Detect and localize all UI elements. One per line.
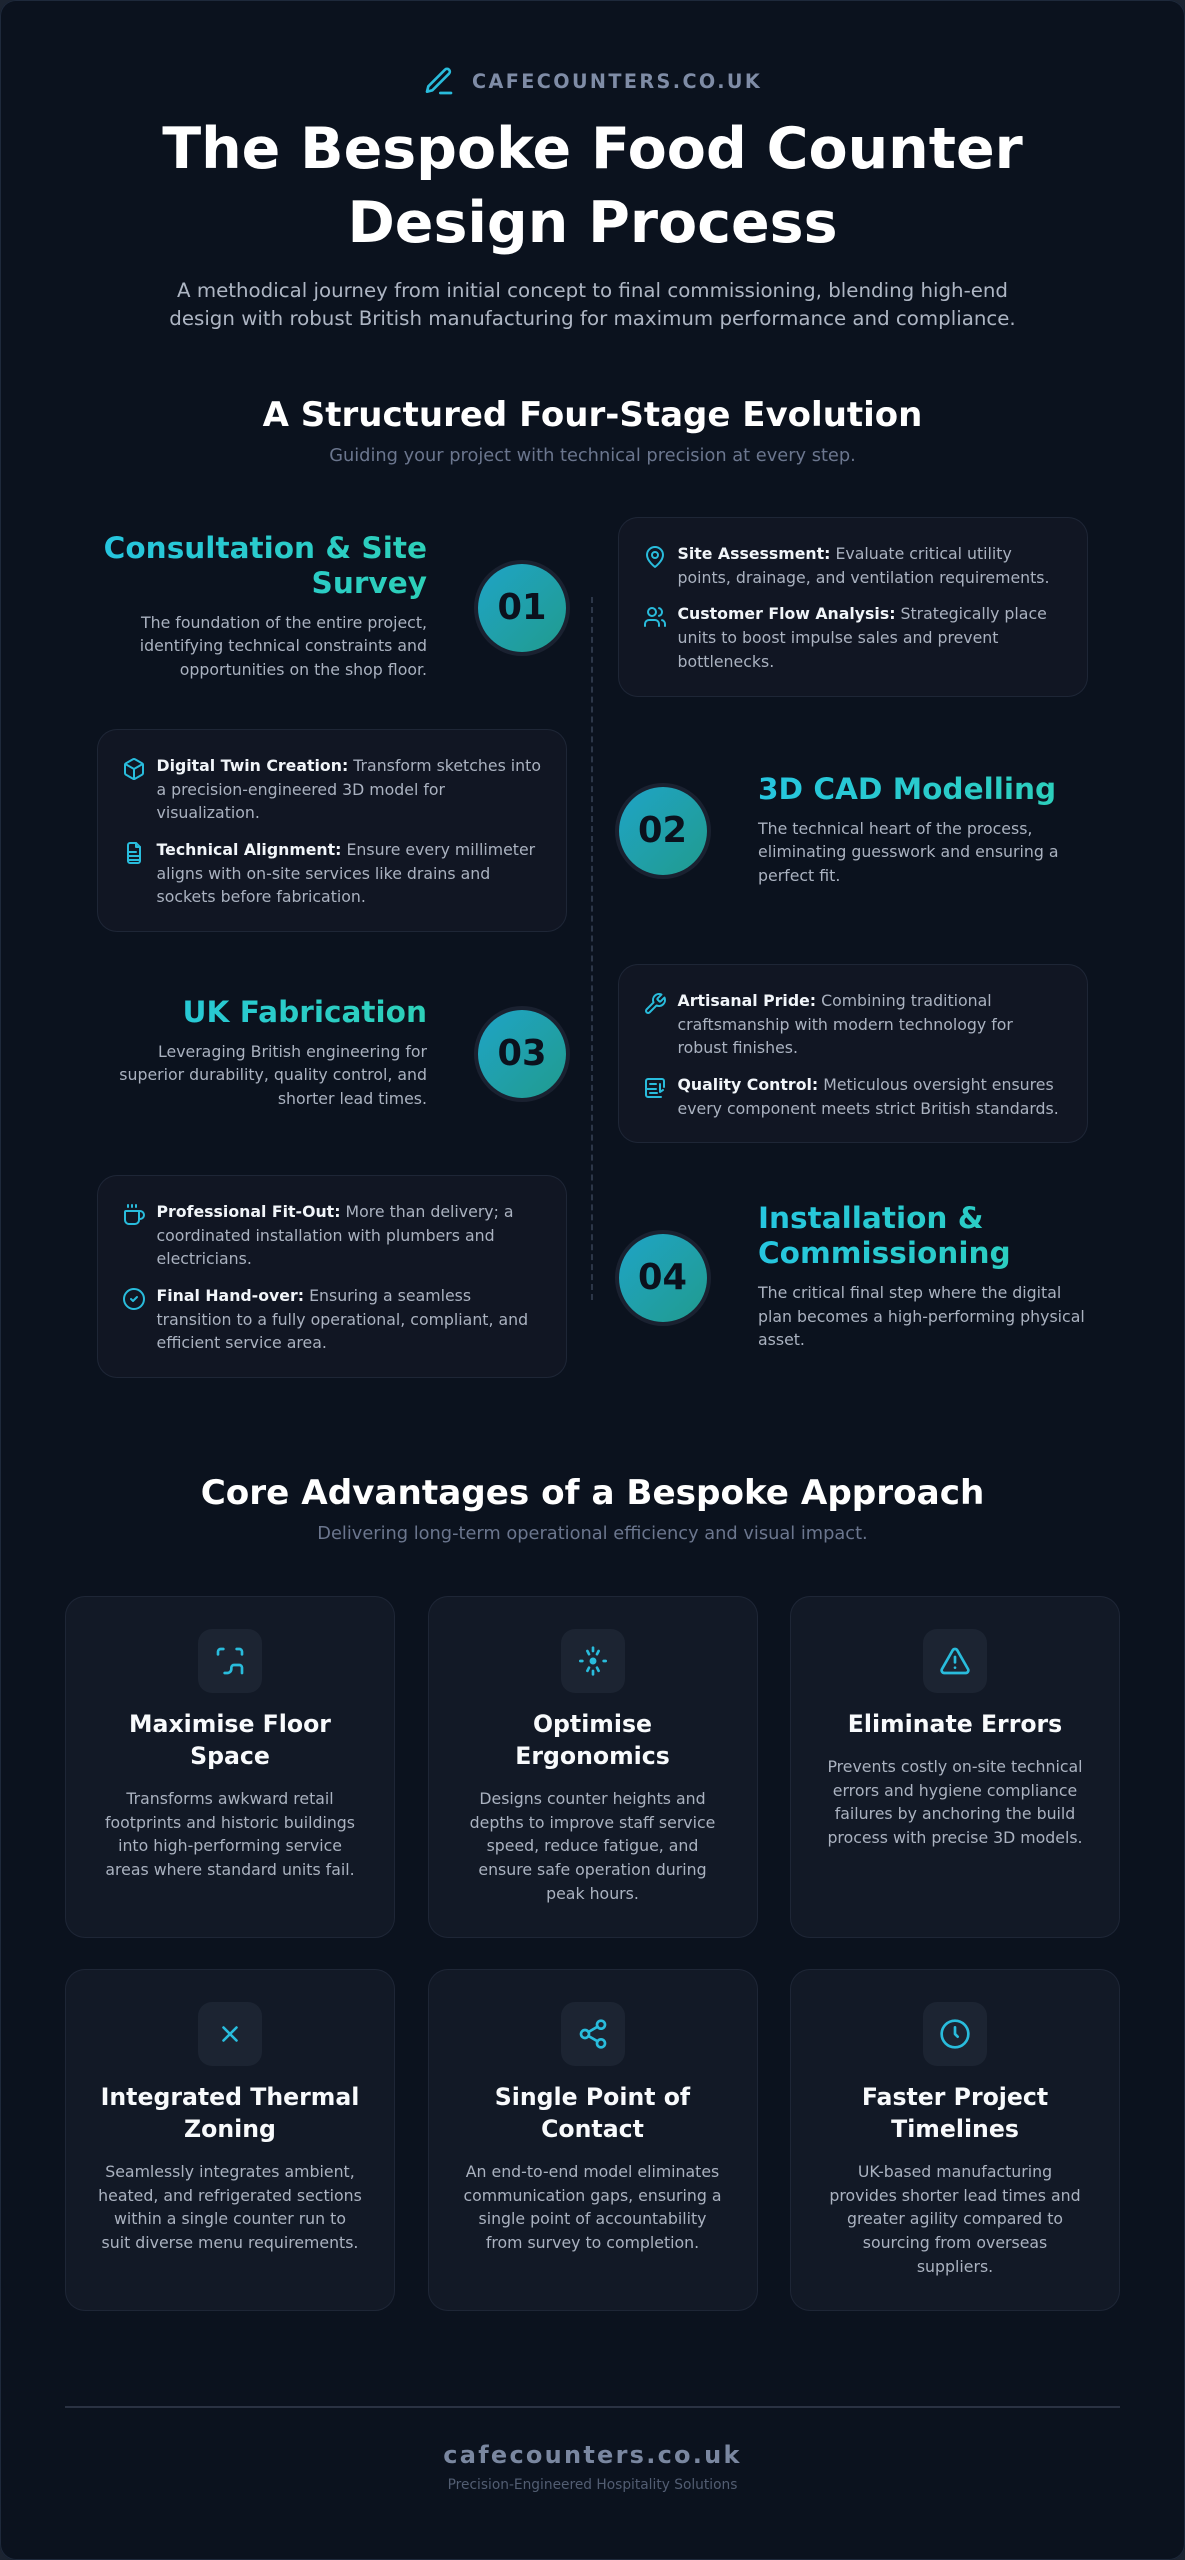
stage 1 title: Consultation & Site — [104, 531, 427, 565]
stage 4 description: plan becomes a high-performing physical — [758, 1307, 1085, 1326]
card title: Optimise — [533, 1710, 652, 1738]
digital twin item — [124, 756, 541, 822]
card: integrated thermal zoning — [65, 1969, 395, 2311]
stage 4 title: Installation & — [758, 1201, 984, 1235]
digital twin item: a precision-engineered 3D model for — [156, 780, 445, 799]
final hand-over item: efficient service area. — [156, 1333, 327, 1352]
customer flow item — [644, 604, 1047, 671]
card title — [129, 1710, 331, 1770]
professional fit-out item — [124, 1202, 514, 1268]
card text: process with precise 3D models. — [827, 1828, 1083, 1847]
card text: greater agility compared to — [847, 2209, 1063, 2228]
subtitle: A methodical journey from initial concept to final commissioning, blending high-end — [177, 278, 1008, 302]
stage 1 title — [97, 531, 427, 601]
stage 3 number — [478, 1010, 566, 1098]
stage 2 detail panel — [97, 729, 567, 932]
card title — [862, 2082, 1048, 2142]
icon: radial ticks — [560, 1629, 624, 1693]
heading: Core Advantages of a Bespoke Approach — [201, 1473, 984, 1513]
technical alignment item: aligns with on-site services like drains and — [156, 864, 490, 883]
technical alignment item — [127, 840, 536, 906]
icon: pen — [426, 68, 452, 94]
final hand-over item: transition to a fully operational, compliant, and — [156, 1310, 528, 1329]
digital twin item: Digital Twin Creation: Transform sketches into — [156, 756, 541, 775]
header — [162, 68, 1023, 330]
stage 1 title: Survey — [312, 566, 427, 600]
card: single point of contact — [428, 1969, 758, 2311]
card text: within a single counter run to — [114, 2209, 346, 2228]
card text — [470, 1789, 715, 1903]
stage 1 number — [478, 564, 566, 652]
subtitle: design with robust British manufacturing for maximum performance and compliance. — [169, 306, 1016, 330]
card text — [463, 2162, 722, 2252]
card title: Zoning — [184, 2114, 276, 2142]
stage 1 description: The foundation of the entire project, — [141, 612, 427, 632]
card text: Prevents costly on-site technical — [827, 1757, 1083, 1776]
brand name: CAFECOUNTERS.CO.UK — [472, 70, 762, 92]
card text: Designs counter heights and — [479, 1789, 706, 1808]
card text: footprints and historic buildings — [105, 1813, 355, 1832]
stage 1 number: 01 — [498, 586, 546, 628]
stage 2 description: perfect fit. — [758, 866, 840, 885]
stage 2 title: 3D CAD Modelling — [758, 772, 1056, 806]
customer flow item: units to boost impulse sales and prevent — [678, 628, 998, 647]
card text — [105, 1789, 355, 1879]
stage 4 description: asset. — [758, 1330, 805, 1349]
stage 3 description: superior durability, quality control, and — [119, 1065, 427, 1084]
technical alignment item: sockets before fabrication. — [156, 887, 366, 906]
stage 2 description: eliminating guesswork and ensuring a — [758, 842, 1059, 861]
final hand-over item: Final Hand-over: Ensuring a seamless — [156, 1286, 471, 1305]
title: Design Process — [347, 190, 838, 256]
card text: Transforms awkward retail — [126, 1789, 334, 1808]
card text: peak hours. — [546, 1884, 639, 1903]
stage 1 description — [140, 612, 427, 679]
card: eliminate errors — [790, 1596, 1120, 1938]
stage 1 description: identifying technical constraints and — [140, 636, 427, 655]
footer brand: cafecounters.co.uk — [443, 2441, 742, 2469]
stage 3 description: Leveraging British engineering for — [158, 1042, 427, 1060]
stage 4 description — [758, 1283, 1085, 1349]
card title: Contact — [541, 2114, 644, 2142]
card title: Eliminate Errors — [848, 1710, 1062, 1738]
card text: errors and hygiene compliance — [833, 1781, 1077, 1800]
footer tagline: Precision-Engineered Hospitality Solutions — [448, 2477, 737, 2493]
stage 4 detail panel — [97, 1175, 567, 1378]
stage 3: UK fabrication — [119, 964, 1088, 1143]
technical alignment item: Technical Alignment: Ensure every millimeter — [156, 840, 535, 859]
quality control item: Quality Control: Meticulous oversight ensures — [678, 1075, 1054, 1094]
title — [162, 116, 1023, 256]
artisanal pride item — [645, 991, 1013, 1057]
card title — [101, 2082, 359, 2142]
stage 2 description: The technical heart of the process, — [758, 818, 1032, 838]
title: The Bespoke Food Counter — [162, 116, 1023, 182]
artisanal pride item: Artisanal Pride: Combining traditional — [678, 991, 992, 1010]
stage 2 number — [618, 786, 706, 874]
stage 4 title: Commissioning — [758, 1236, 1011, 1270]
card text: suit diverse menu requirements. — [102, 2233, 358, 2252]
card title: Timelines — [891, 2114, 1019, 2142]
card text — [829, 2162, 1081, 2276]
card title: Integrated Thermal — [101, 2082, 359, 2110]
card text: failures by anchoring the build — [835, 1804, 1075, 1823]
card text: ensure safe operation during — [478, 1860, 707, 1879]
site assessment item: Site Assessment: Evaluate critical utility — [678, 544, 1012, 563]
site assessment item: points, drainage, and ventilation requirements. — [678, 568, 1050, 587]
stage 4 title — [758, 1201, 1088, 1271]
stage 4 number: 04 — [638, 1256, 687, 1298]
card title: Single Point of — [495, 2082, 690, 2110]
card title: Maximise Floor — [129, 1710, 331, 1738]
stage 3 detail panel — [618, 964, 1088, 1143]
card title: Space — [190, 1742, 270, 1770]
icon: clock — [923, 2002, 987, 2066]
subtitle — [169, 278, 1016, 330]
card text — [827, 1757, 1083, 1847]
stage 4: installation and commissioning — [97, 1175, 1085, 1378]
stage 2 number: 02 — [638, 810, 687, 850]
customer flow item: bottlenecks. — [678, 652, 774, 671]
subheading: Guiding your project with technical precision at every step. — [329, 445, 856, 466]
site assessment item — [646, 544, 1050, 587]
stage 2: 3D CAD modelling — [97, 729, 1059, 932]
icon: cross — [198, 2002, 262, 2066]
artisanal pride item: craftsmanship with modern technology for — [678, 1015, 1013, 1034]
card text: depths to improve staff service — [470, 1813, 715, 1832]
section heading: four-stage evolution — [262, 395, 922, 466]
card title: Faster Project — [862, 2082, 1048, 2110]
icon: share — [560, 2002, 624, 2066]
card text: areas where standard units fail. — [105, 1860, 355, 1879]
card text: heated, and refrigerated sections — [98, 2186, 362, 2205]
stage 1 detail panel — [618, 517, 1088, 697]
heading: A Structured Four-Stage Evolution — [263, 395, 922, 435]
card text: UK-based manufacturing — [858, 2162, 1052, 2181]
card text — [98, 2162, 362, 2252]
professional fit-out item: coordinated installation with plumbers and — [156, 1226, 495, 1245]
card title: Ergonomics — [515, 1742, 670, 1770]
stage 1: consultation and site survey — [104, 517, 1088, 697]
subheading: Delivering long-term operational efficiency and visual impact. — [317, 1523, 868, 1544]
professional fit-out item: Professional Fit-Out: More than delivery; a — [156, 1202, 514, 1221]
icon: scan frame — [198, 1629, 262, 1693]
customer flow item: Customer Flow Analysis: Strategically place — [678, 604, 1047, 623]
stage 4 number — [618, 1234, 706, 1322]
stage 3 description: shorter lead times. — [278, 1089, 427, 1108]
card title — [495, 2082, 690, 2142]
quality control item: every component meets strict British standards. — [678, 1099, 1059, 1118]
card text: from survey to completion. — [486, 2233, 699, 2252]
stage 3 description — [119, 1042, 427, 1108]
card: optimise ergonomics — [428, 1596, 758, 1938]
card text: single point of accountability — [478, 2209, 706, 2228]
final hand-over item — [123, 1286, 528, 1352]
card title — [515, 1710, 670, 1770]
card text: communication gaps, ensuring a — [463, 2186, 722, 2205]
professional fit-out item: electricians. — [156, 1249, 252, 1268]
stage 3 number: 03 — [498, 1032, 546, 1074]
card text: Seamlessly integrates ambient, — [105, 2162, 355, 2181]
card text: into high-performing service — [118, 1836, 342, 1855]
icon: warning triangle — [923, 1629, 987, 1693]
card text: An end-to-end model eliminates — [466, 2162, 719, 2181]
stage 1 description: opportunities on the shop floor. — [180, 660, 427, 679]
stage 3 title: UK Fabrication — [183, 995, 427, 1029]
card: maximise floor space — [65, 1596, 395, 1938]
section heading: core advantages — [201, 1473, 984, 1544]
artisanal pride item: robust finishes. — [678, 1038, 798, 1057]
card text: speed, reduce fatigue, and — [487, 1836, 698, 1855]
quality control item — [645, 1075, 1059, 1118]
card text: suppliers. — [917, 2257, 993, 2276]
digital twin item: visualization. — [156, 803, 260, 822]
card: faster project timelines — [790, 1969, 1120, 2311]
footer — [65, 2406, 1120, 2493]
timeline dashed line — [591, 597, 593, 1300]
stage 4 description: The critical final step where the digital — [758, 1283, 1061, 1302]
card text: provides shorter lead times and — [829, 2186, 1081, 2205]
stage 2 description — [758, 818, 1059, 885]
card text: sourcing from overseas — [863, 2233, 1047, 2252]
